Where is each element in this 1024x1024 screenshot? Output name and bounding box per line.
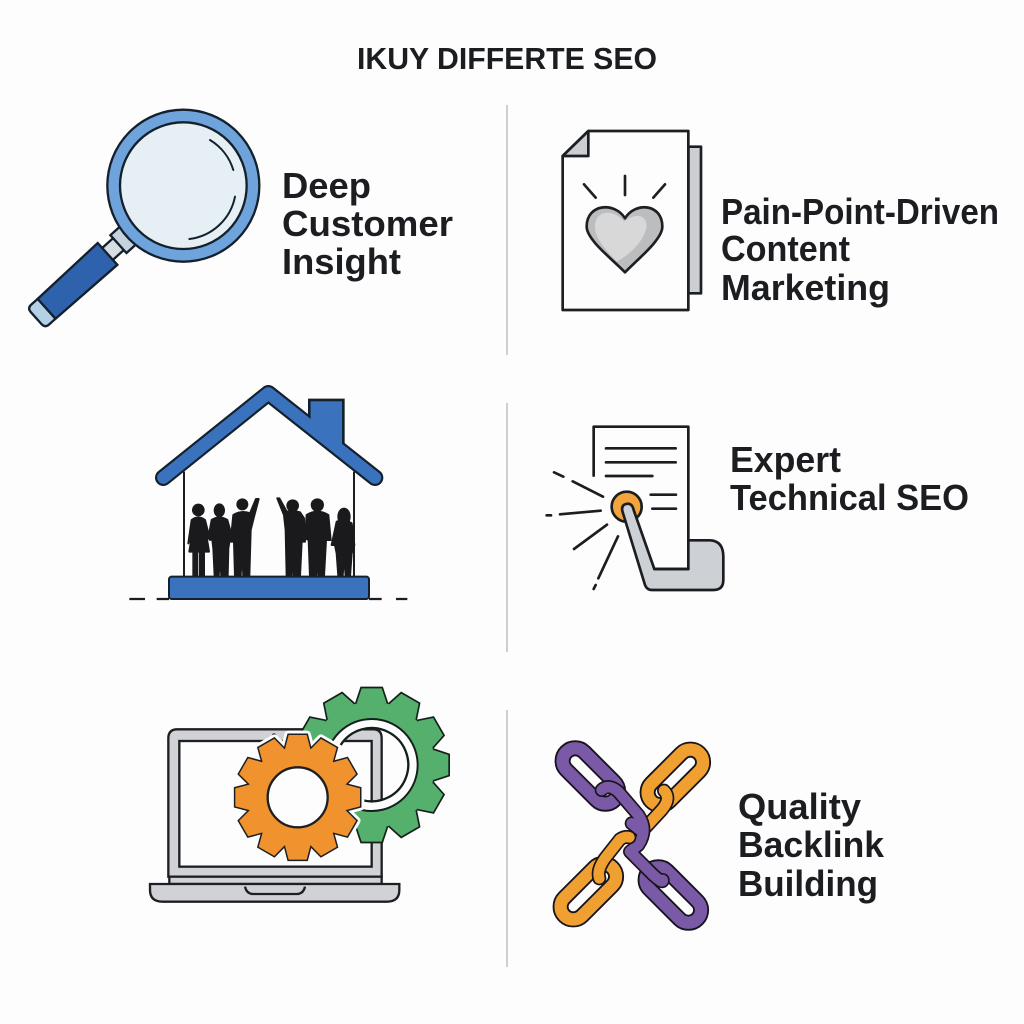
text: quality backlink building: Backlink xyxy=(738,824,885,865)
text: deep customer insight: Insight xyxy=(282,241,401,282)
text: expert technical seo: Expert xyxy=(730,439,841,480)
icon: laptop with gears xyxy=(150,688,448,902)
text: deep customer insight: Customer xyxy=(282,203,453,244)
visible laptop corner inside green gear hole xyxy=(340,726,410,803)
icon: magnifying glass xyxy=(26,110,259,329)
orange gear xyxy=(235,735,360,860)
text: pain-point-driven content marketing: Content xyxy=(721,228,850,269)
text: quality backlink building: Building xyxy=(738,863,878,904)
text: quality backlink building xyxy=(738,786,885,904)
icon: document with clicked pointer xyxy=(547,427,723,590)
outer chain links xyxy=(555,743,708,928)
text: deep customer insight: Deep xyxy=(282,165,371,206)
icon: document with heart xyxy=(563,131,701,310)
central orange upper strand xyxy=(642,791,667,832)
title: IKUY DIFFERTE SEO xyxy=(357,41,657,76)
laptop xyxy=(150,729,399,902)
text: quality backlink building: Quality xyxy=(738,786,861,827)
central orange lower strand xyxy=(599,837,629,878)
icon: house with people xyxy=(129,393,407,599)
central purple strand xyxy=(602,787,663,881)
text: expert technical seo xyxy=(730,439,969,518)
text: pain-point-driven content marketing xyxy=(721,191,999,308)
text: pain-point-driven content marketing: Marketing xyxy=(721,267,890,308)
green gear xyxy=(295,688,448,842)
text: deep customer insight xyxy=(282,165,453,282)
text: pain-point-driven content marketing: Pain-Point-Driven xyxy=(721,191,999,232)
people silhouettes xyxy=(188,498,354,576)
text: expert technical seo: Technical SEO xyxy=(730,477,969,518)
icon: crossed chain links xyxy=(555,743,708,928)
